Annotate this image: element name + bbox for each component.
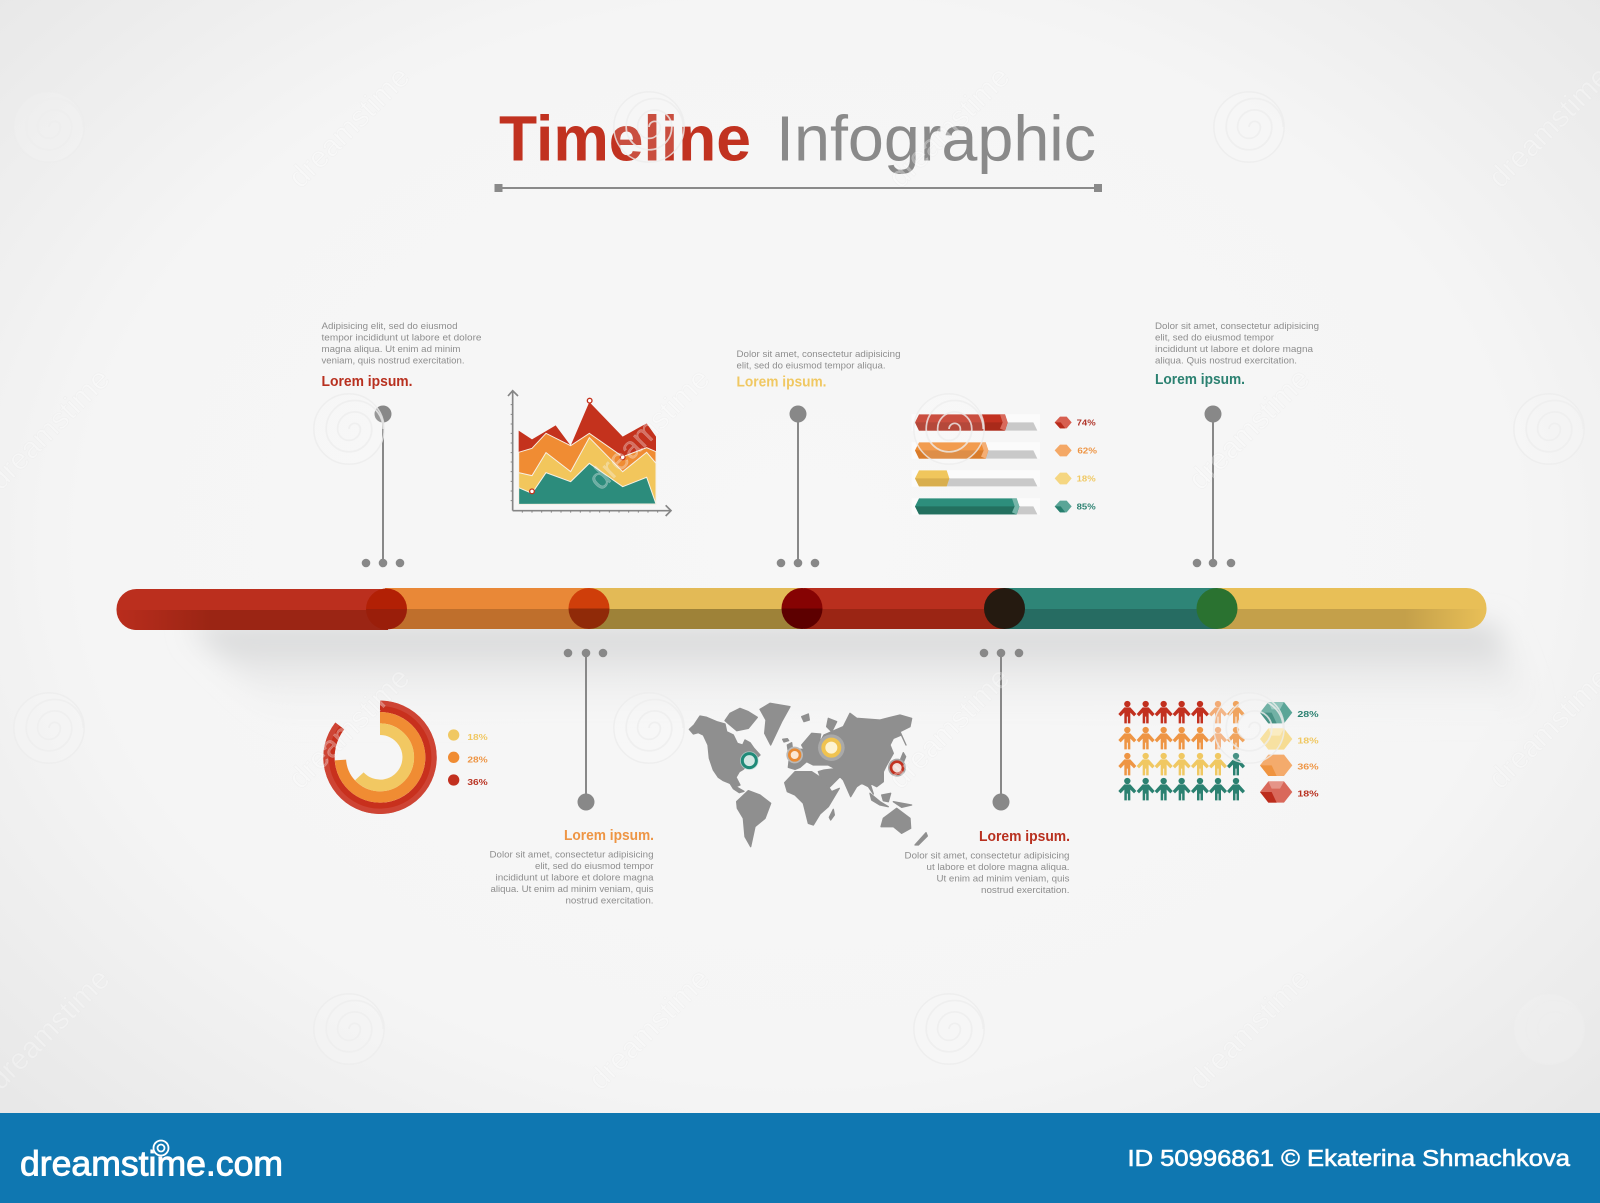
gem 18%: 18% (1297, 735, 1319, 745)
text block: bottom left: incididunt ut labore et dolore magna (496, 872, 654, 884)
title words: Timeline (499, 102, 751, 174)
title words: Infographic (776, 102, 1096, 174)
node 4 (984, 588, 1025, 629)
watermark spirals and wordmarks: dreamstime (582, 362, 716, 496)
row 2 (1118, 727, 1245, 749)
text block: top left: Lorem ipsum. (322, 373, 412, 390)
legend 18% (448, 729, 488, 742)
text block: top left: veniam, quis nostrud exercitation. (322, 356, 464, 366)
value 85%: 85% (1077, 502, 1096, 512)
value 18%: 18% (1077, 474, 1096, 484)
node 1 (366, 588, 407, 630)
text block: top middle: elit, sed do eiusmod tempor aliqua. (736, 360, 886, 372)
text block: bottom right (904, 828, 1070, 896)
gem 28% (1260, 702, 1319, 723)
ring: yellow (359, 729, 408, 785)
text block: bottom right: Dolor sit amet, consectetur adipisicing (904, 850, 1070, 862)
row 1 (1118, 701, 1245, 723)
value 74% (1055, 417, 1096, 428)
node 5 (1196, 588, 1238, 629)
gem 18% red (1260, 781, 1319, 803)
donut chart (326, 703, 488, 811)
text block: top middle (736, 349, 900, 390)
text block: top right (1155, 321, 1319, 388)
connector: bottom 1 (564, 649, 607, 810)
node 2 (568, 588, 610, 629)
marker: yellow (818, 734, 845, 761)
ring: red (326, 703, 434, 811)
watermark spirals and wordmarks: dreamstime (882, 60, 1016, 194)
text block: bottom left: elit, sed do eiusmod tempor (535, 861, 654, 872)
value 62% (1055, 445, 1097, 456)
value 74%: 74% (1077, 417, 1096, 427)
area: red (519, 402, 656, 504)
watermark spirals and wordmarks: dreamstime (582, 962, 716, 1096)
legend 18%: 18% (467, 732, 488, 742)
ring: orange (340, 718, 420, 797)
bar 62% (912, 442, 1040, 459)
bar 74% (912, 414, 1040, 431)
gem 36%: 36% (1297, 762, 1319, 772)
image credit: ID 50996861 © Ekaterina Shmachkova (1128, 1145, 1570, 1171)
marker: teal (740, 751, 759, 770)
data points (530, 398, 625, 494)
legend 36% (448, 774, 488, 787)
text block: top left: tempor incididunt ut labore et dolore (322, 332, 482, 344)
text block: bottom left (490, 827, 654, 906)
marker: red (888, 759, 906, 777)
gem 28%: 28% (1297, 709, 1319, 719)
value 85% (1055, 501, 1096, 512)
segment: teal (1000, 588, 1217, 629)
row 3 (1118, 753, 1245, 775)
text block: bottom right: nostrud exercitation. (981, 885, 1070, 896)
node 3 (782, 588, 822, 629)
logo text: dreamstime.com (20, 1144, 283, 1184)
pictogram chart (1118, 701, 1319, 803)
bar 85% (912, 498, 1040, 515)
text block: top middle: Lorem ipsum. (736, 374, 826, 390)
text block: top right: Dolor sit amet, consectetur adipisicing (1155, 321, 1319, 332)
text block: bottom right: Ut enim ad minim veniam, quis (936, 874, 1070, 884)
watermark spirals and wordmarks: dreamstime (1182, 962, 1316, 1096)
connector: top 3 (1193, 406, 1235, 567)
value 18% (1055, 473, 1096, 484)
area: teal (519, 463, 656, 504)
area: yellow (519, 438, 656, 504)
segment: orange (385, 588, 590, 629)
text block: top right: Lorem ipsum. (1155, 371, 1245, 388)
gem 36% (1260, 755, 1319, 776)
watermark spirals and wordmarks: dreamstime (1182, 362, 1316, 496)
legend 36%: 36% (467, 777, 488, 787)
text block: bottom left: nostrud exercitation. (566, 896, 654, 906)
chart axes (508, 391, 671, 516)
title (494, 102, 1102, 192)
gem 18% red: 18% (1297, 788, 1319, 798)
text block: top left: magna aliqua. Ut enim ad minim (322, 344, 461, 355)
segment: red start (116, 589, 400, 630)
value 62%: 62% (1077, 446, 1097, 456)
bar shadow (190, 625, 1535, 720)
text block: bottom left: Lorem ipsum. (564, 827, 654, 844)
text block: bottom right: ut labore et dolore magna aliqua. (926, 862, 1070, 873)
legend 28% (448, 752, 488, 765)
gem 18% (1260, 728, 1319, 750)
segment: yellow (589, 588, 804, 629)
watermark spirals and wordmarks: dreamstime (282, 661, 416, 795)
icon: logo spiral (154, 1140, 168, 1156)
segment: dark red (800, 588, 1005, 629)
text block: top right: incididunt ut labore et dolore magna (1155, 344, 1314, 355)
watermark spirals and wordmarks: dreamstime (282, 60, 416, 194)
text block: top right: elit, sed do eiusmod tempor (1155, 332, 1274, 344)
text block: bottom right: Lorem ipsum. (979, 828, 1070, 845)
bar chart (912, 414, 1097, 515)
text block: bottom left: Dolor sit amet, consectetur adipisicing (490, 850, 654, 860)
world map (689, 703, 927, 847)
segment: yellow end (1200, 588, 1486, 629)
area: orange (519, 433, 656, 504)
footer banner (0, 1113, 1600, 1203)
connector: top 2 (777, 406, 819, 567)
connector: top 1 (362, 406, 404, 567)
marker: orange (786, 747, 803, 763)
text block: top left: Adipisicing elit, sed do eiusmod (322, 321, 458, 332)
title underline (494, 184, 1102, 192)
row 4 (1118, 778, 1245, 800)
watermark spirals and wordmarks: dreamstime (882, 661, 1016, 795)
connector: bottom 2 (980, 649, 1023, 810)
bar 18% (912, 470, 1040, 487)
legend 28%: 28% (467, 755, 488, 765)
text block: top middle: Dolor sit amet, consectetur adipisicing (736, 349, 900, 360)
text block: top left (322, 321, 482, 390)
area chart (508, 391, 671, 516)
text block: bottom left: aliqua. Ut enim ad minim veniam, quis (490, 884, 654, 895)
timeline bar (116, 588, 1486, 630)
continents (689, 703, 927, 847)
text block: top right: aliqua. Quis nostrud exercitation. (1155, 356, 1297, 366)
